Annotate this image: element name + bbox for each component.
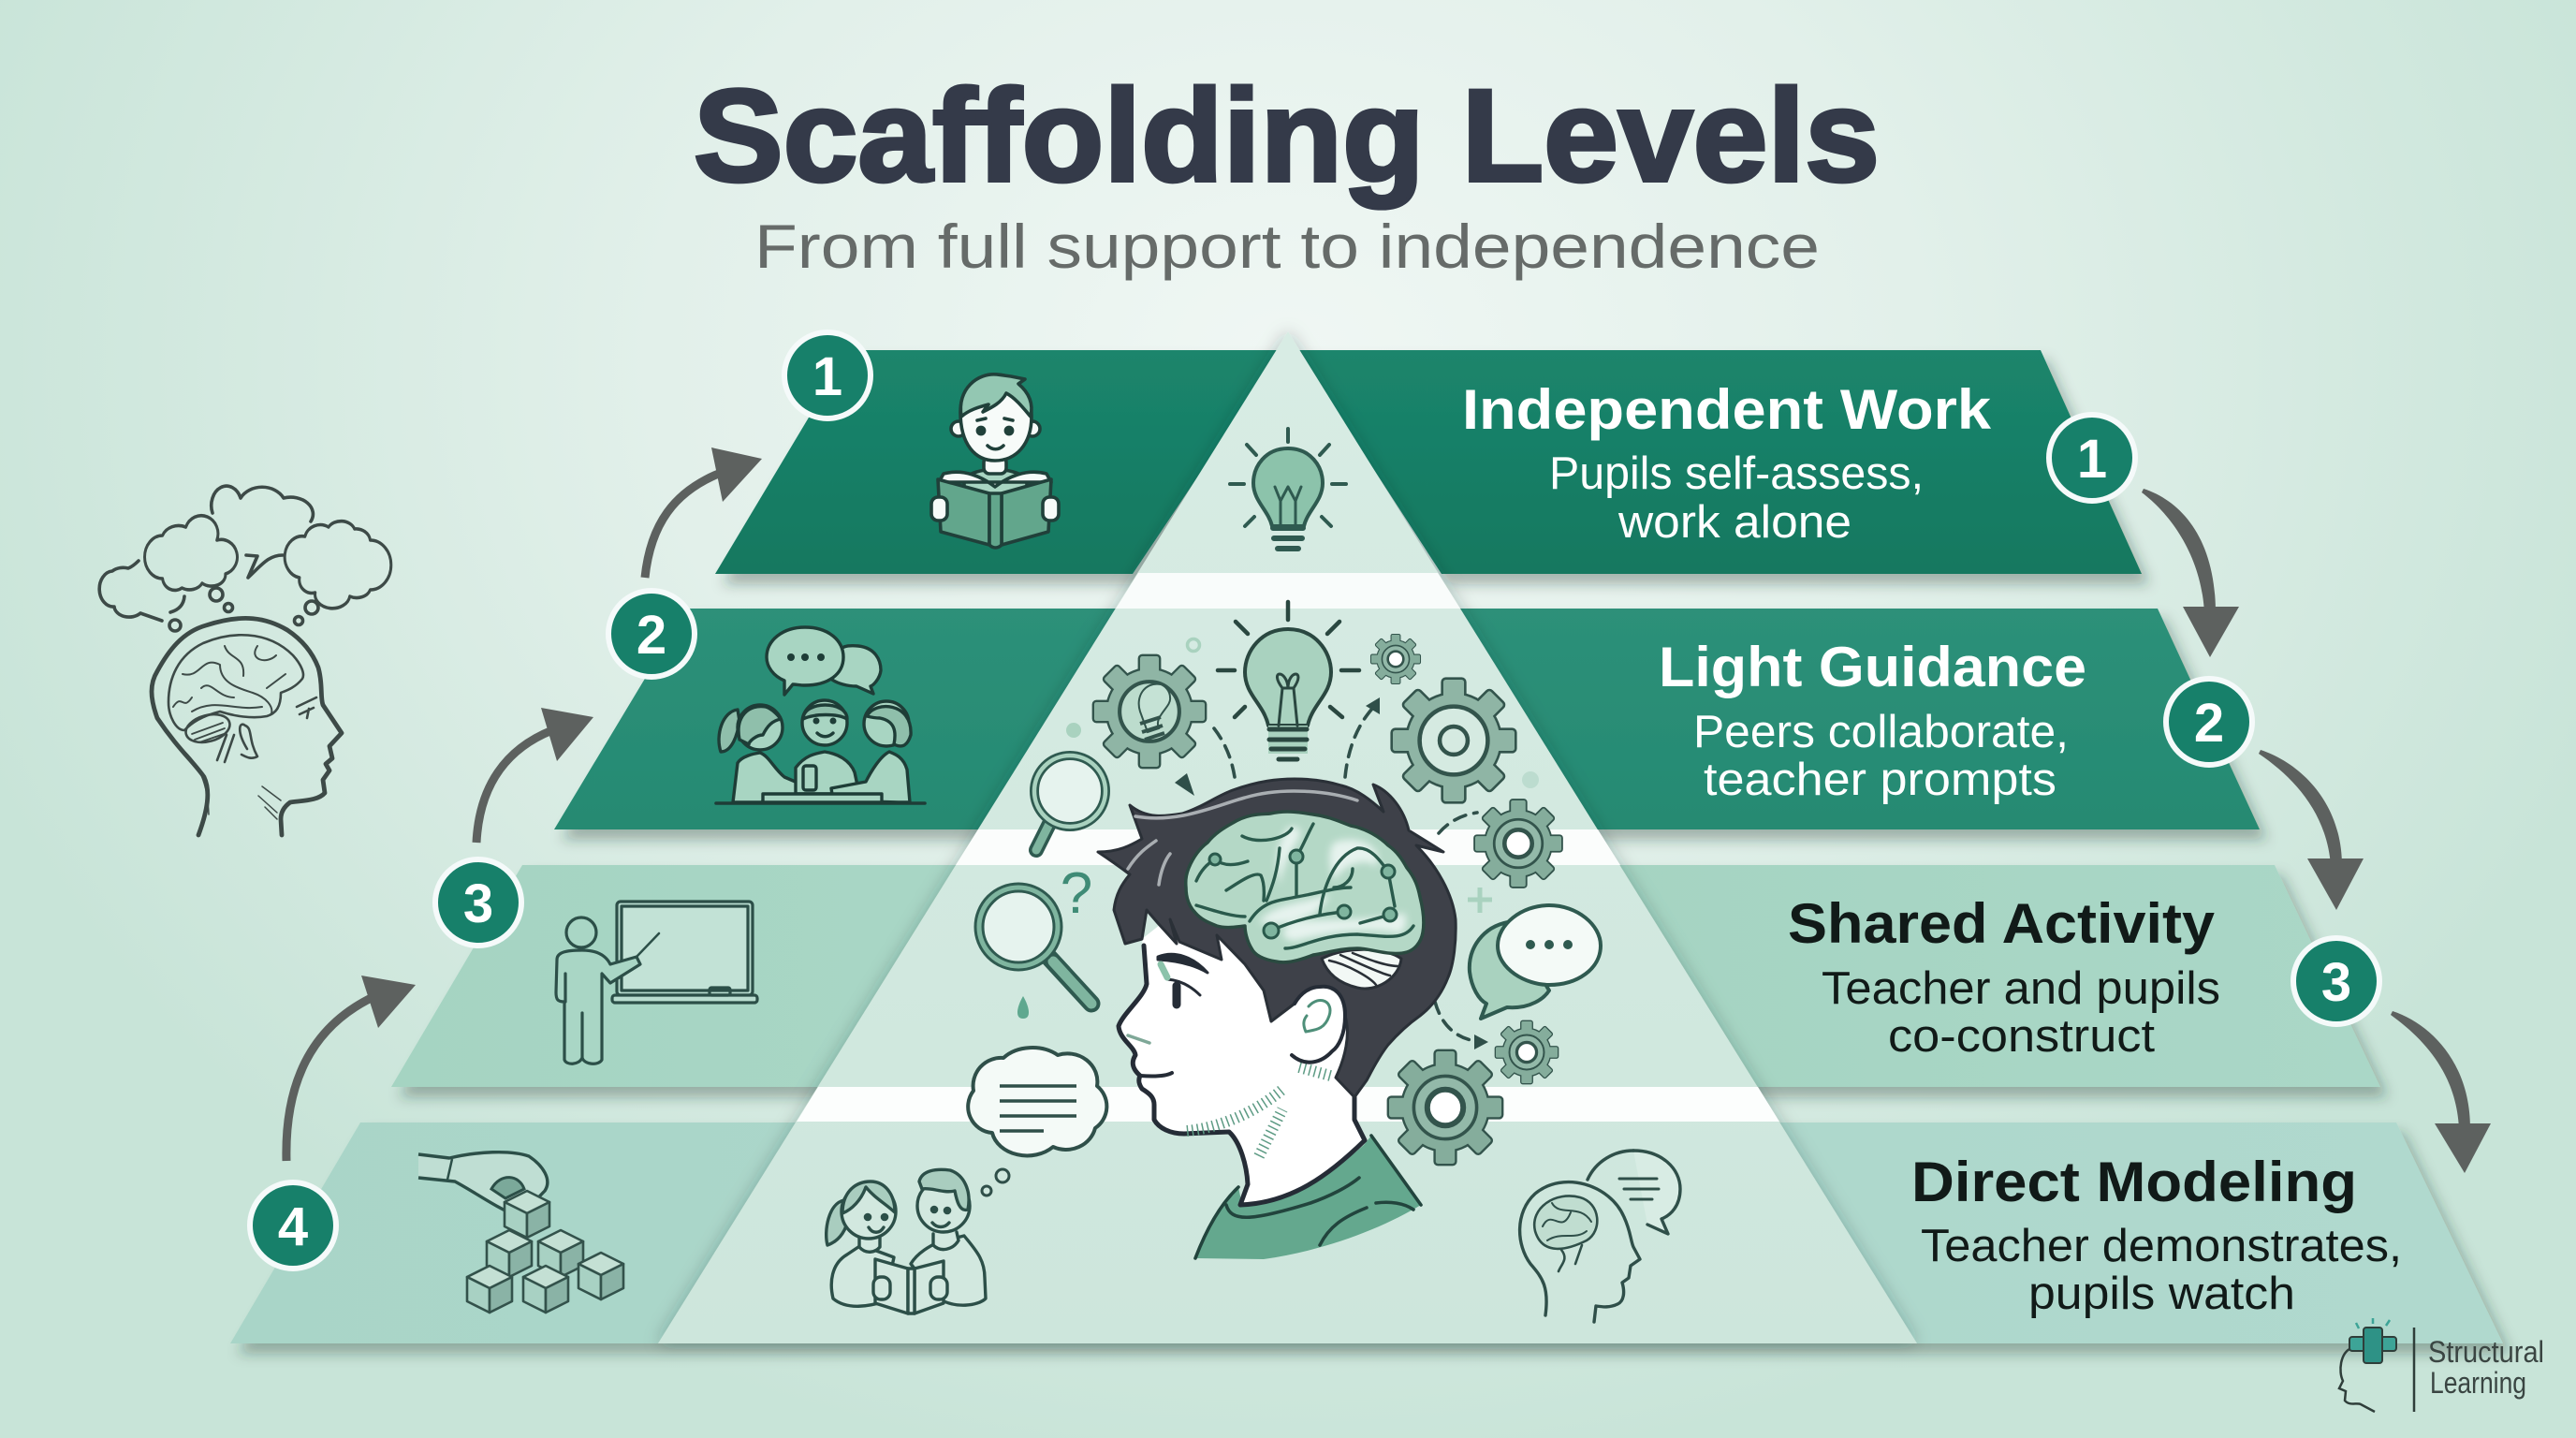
icon: gear with bulb bbox=[1094, 656, 1205, 767]
left number badges: 1 bbox=[812, 346, 842, 407]
right number badges: 1 bbox=[2077, 429, 2107, 490]
small decorative dots bbox=[1017, 638, 1539, 1019]
boy shirt outline bbox=[1195, 1136, 1421, 1258]
band 2 right: light guidance bbox=[1404, 609, 2260, 829]
text: shared activity bbox=[1788, 892, 2220, 1062]
text: shared activity: co-construct bbox=[1888, 1011, 2155, 1062]
icon: dashed connector arrows bbox=[1214, 709, 1481, 1042]
icon: two children reading bbox=[827, 1169, 986, 1313]
title: Scaffolding Levels bbox=[694, 62, 1880, 209]
band 3 left: shared activity bbox=[391, 865, 1217, 1087]
text: shared activity: Teacher and pupils bbox=[1822, 963, 2220, 1014]
icon: top lightbulb bbox=[1230, 429, 1346, 549]
logo icon bbox=[2339, 1318, 2396, 1412]
icon: boy reading book bbox=[931, 374, 1059, 548]
icon: idea cluster in middle tier bbox=[979, 602, 1601, 1164]
step arrows down bbox=[2142, 489, 2491, 1173]
right number badges: 2 bbox=[2194, 693, 2224, 754]
icon: dashed arrow heads bbox=[1175, 697, 1488, 1049]
icon: boy profile with brain bbox=[1098, 779, 1456, 1259]
boy shirt bbox=[1195, 1136, 1421, 1259]
text: independent work: Independent Work bbox=[1462, 378, 1992, 441]
icon: gears bbox=[1371, 635, 1561, 1164]
step arrows up bbox=[286, 448, 762, 1161]
text: independent work bbox=[1462, 378, 1992, 548]
icon: thought cloud bbox=[968, 1048, 1106, 1196]
text: light guidance: Peers collaborate, bbox=[1693, 707, 2069, 757]
logo divider bbox=[2413, 1328, 2415, 1412]
icon: head with brain and speech bubble bbox=[1520, 1151, 1680, 1322]
boy neck hatching bbox=[1187, 1067, 1334, 1156]
boy ear bbox=[1292, 987, 1345, 1063]
icon: head with thought clouds bbox=[99, 486, 391, 835]
text: light guidance: Light Guidance bbox=[1659, 636, 2086, 698]
subtitle: From full support to independence bbox=[754, 212, 1820, 281]
band 1 left: independent work bbox=[715, 350, 1282, 574]
text: light guidance: teacher prompts bbox=[1704, 755, 2056, 805]
text: shared activity: Shared Activity bbox=[1788, 892, 2216, 955]
boy face and neck bbox=[1119, 843, 1404, 1205]
left number badges: 3 bbox=[463, 873, 493, 934]
band 4: direct modeling bbox=[230, 1123, 2503, 1343]
central pyramid bbox=[658, 331, 1917, 1343]
question mark: ? bbox=[1061, 861, 1092, 926]
band 2 left: light guidance bbox=[554, 609, 1170, 829]
icon: central lightbulb bbox=[1218, 602, 1359, 759]
left number badges: 2 bbox=[637, 605, 666, 666]
icon: hand placing blocks bbox=[418, 1152, 623, 1313]
left number badges: 4 bbox=[278, 1196, 308, 1257]
right number badges: 3 bbox=[2321, 952, 2351, 1013]
text: direct modeling bbox=[1911, 1151, 2402, 1319]
logo text: Structural bbox=[2428, 1335, 2544, 1369]
text: light guidance bbox=[1659, 636, 2086, 805]
boy hair highlight bbox=[1128, 791, 1357, 885]
text: independent work: Pupils self-assess, bbox=[1549, 448, 1924, 499]
icon: magnifiers bbox=[979, 756, 1105, 1004]
text: independent work: work alone bbox=[1617, 497, 1852, 548]
icon: pupils collaborating at table bbox=[716, 627, 925, 803]
text: direct modeling: pupils watch bbox=[2028, 1269, 2295, 1319]
brain bbox=[1186, 812, 1424, 989]
icon: speech bubbles bbox=[1470, 905, 1601, 1019]
band 3 right: shared activity bbox=[1591, 865, 2380, 1087]
boy eye and brow bbox=[1128, 954, 1208, 1077]
logo: Structural Learning bbox=[2339, 1318, 2544, 1412]
logo text bbox=[2428, 1335, 2544, 1400]
logo text: Learning bbox=[2430, 1366, 2526, 1400]
icon: teacher at whiteboard bbox=[556, 902, 757, 1064]
boy hair bbox=[1098, 779, 1456, 1097]
left number badges bbox=[250, 332, 871, 1269]
text: direct modeling: Direct Modeling bbox=[1911, 1151, 2357, 1213]
band 1 right: independent work bbox=[1296, 350, 2142, 574]
right number badges bbox=[2049, 415, 2379, 1024]
text: direct modeling: Teacher demonstrates, bbox=[1921, 1221, 2402, 1271]
boy ear detail bbox=[1304, 1000, 1330, 1032]
boy face outline bbox=[1119, 946, 1365, 1205]
